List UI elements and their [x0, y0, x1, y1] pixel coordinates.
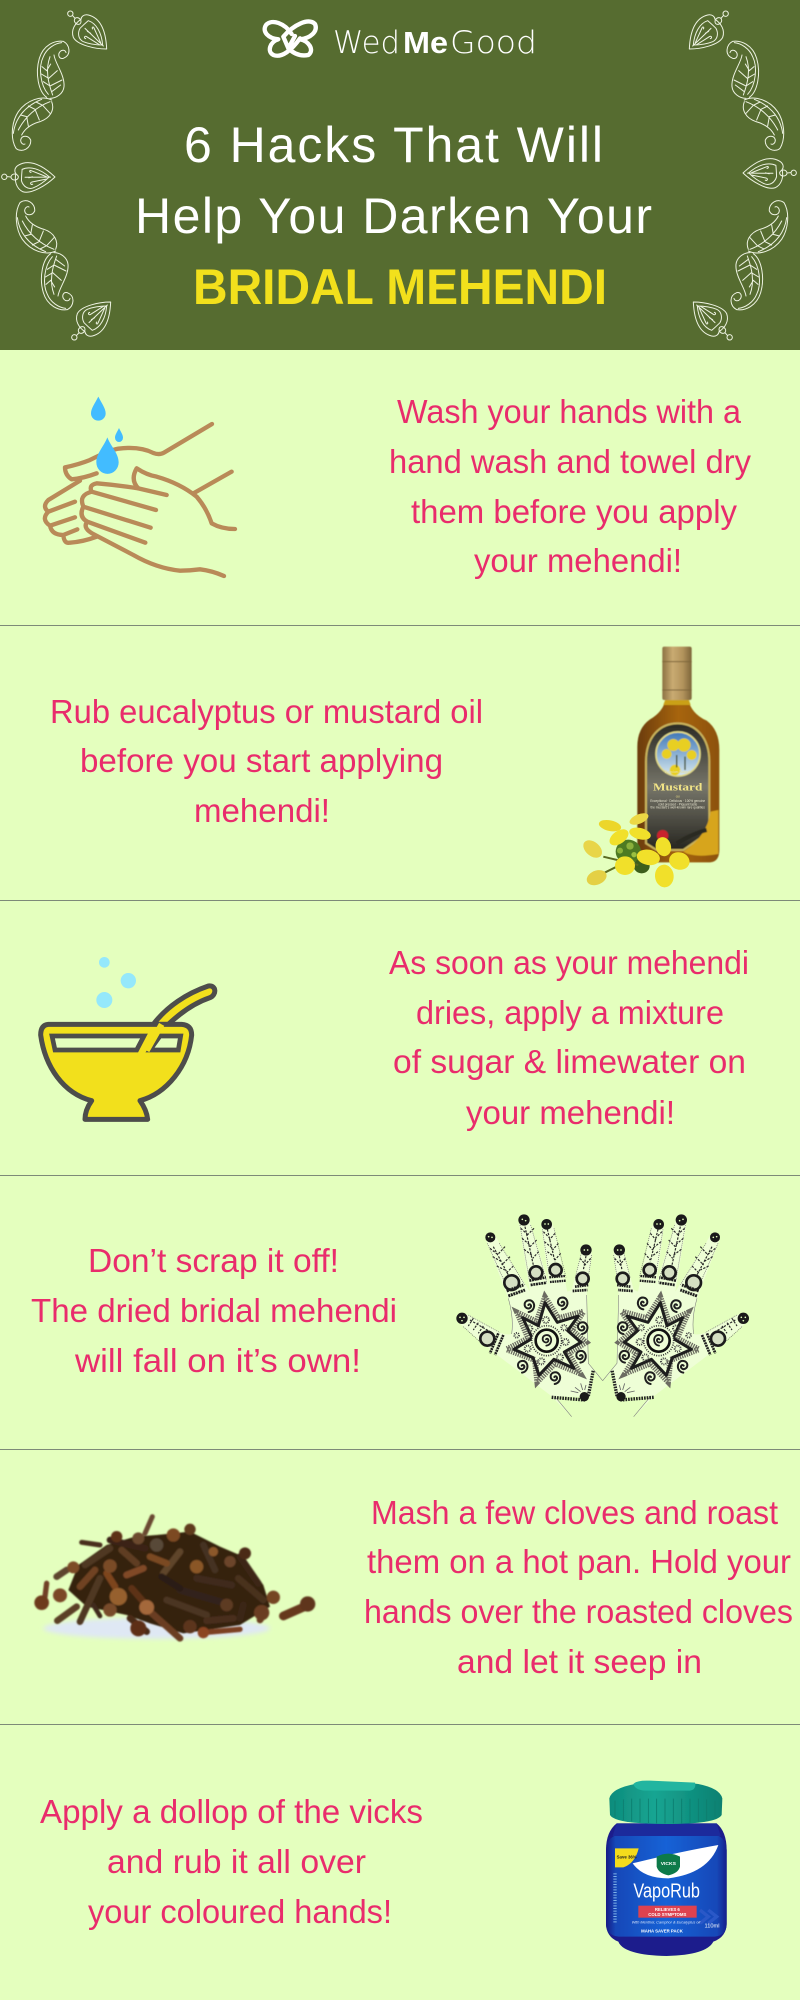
text: hack 3: dries, apply a mixture	[416, 994, 724, 1031]
icon: VapoRub jar	[606, 1781, 727, 1956]
text: hack 2: mehendi!	[194, 792, 330, 829]
panel: hack 6 vicks	[0, 1725, 800, 2000]
jar text: 110ml	[704, 1923, 719, 1929]
text: hack 6	[40, 1793, 423, 1930]
jar text: RELIEVES 6	[655, 1907, 680, 1912]
text: hack 5: and let it seep in	[457, 1643, 702, 1680]
logo: WedMeGood	[265, 22, 537, 61]
panel: hack 1 hand wash	[0, 350, 800, 625]
text: hack 1: your mehendi!	[474, 542, 682, 579]
text: hack 2: Rub eucalyptus or mustard oil	[50, 693, 483, 730]
decorative leaf: left centre	[1, 150, 55, 204]
text: hack 4: will fall on it’s own!	[74, 1342, 361, 1379]
title: 6 Hacks That Will	[184, 117, 603, 173]
text: hack 4: Don’t scrap it off!	[88, 1242, 339, 1279]
text: hack 6: and rub it all over	[107, 1843, 366, 1880]
text: hack 3: As soon as your mehendi	[389, 944, 749, 981]
title	[135, 117, 652, 315]
decorative leaf: right centre	[743, 146, 797, 200]
title: BRIDAL MEHENDI	[193, 259, 607, 315]
text: hack 1: hand wash and towel dry	[389, 443, 751, 480]
wordmark	[333, 25, 537, 61]
label text: Premium Natural	[665, 770, 690, 774]
jar text: MAHA SAVER PACK	[641, 1928, 684, 1933]
icon: washing hands with water drops	[45, 397, 235, 576]
label text: Exceptional · Delicious · 100% genuine	[650, 799, 705, 803]
jar text: VICKS	[661, 1861, 677, 1867]
text: hack 6: Apply a dollop of the vicks	[40, 1793, 423, 1830]
decorative mehendi border: bottom right	[693, 201, 788, 340]
text: hack 1: Wash your hands with a	[397, 393, 742, 430]
title: Help You Darken Your	[135, 188, 652, 244]
text: hack 3	[389, 944, 749, 1131]
text: hack 1	[389, 393, 751, 579]
panel: hack 4 do not scrape	[0, 1176, 800, 1449]
text: hack 4	[31, 1242, 397, 1379]
text: hack 4: The dried bridal mehendi	[31, 1292, 397, 1329]
wordmark: Wed	[333, 25, 400, 61]
icon: pile of cloves	[34, 1517, 315, 1639]
text: hack 2	[50, 693, 483, 829]
jar text	[617, 1854, 719, 1933]
decorative mehendi border: bottom left	[16, 201, 111, 340]
jar text: VapoRub	[633, 1879, 700, 1902]
text: hack 3: of sugar & limewater on	[393, 1043, 746, 1080]
text: hack 5	[364, 1494, 793, 1680]
label text: Mustard	[653, 782, 702, 794]
icon: mehendi patterned hands	[456, 1214, 749, 1417]
decorative mehendi border: top left	[12, 11, 107, 150]
decorative mehendi border: top right	[689, 11, 784, 150]
text: hack 5: hands over the roasted cloves	[364, 1593, 793, 1630]
wordmark: Me	[403, 25, 448, 60]
text: hack 5: them on a hot pan. Hold your	[367, 1543, 791, 1580]
jar text: COLD SYMPTOMS	[648, 1912, 687, 1917]
text: hack 5: Mash a few cloves and roast	[371, 1494, 778, 1531]
text: hack 1: them before you apply	[411, 493, 737, 530]
label text	[650, 770, 705, 810]
jar text: Save 36%	[617, 1854, 637, 1859]
text: hack 2: before you start applying	[80, 742, 443, 779]
panel: header	[0, 0, 800, 350]
panel: hack 2 mustard oil	[0, 626, 800, 900]
label text: the mustard's well-known rare qualities	[651, 806, 705, 810]
label text: cold pressed · Piquant taste	[658, 802, 697, 806]
icon: yellow bowl with spoon and bubbles	[41, 957, 215, 1119]
panel: hack 5 cloves	[0, 1450, 800, 1724]
text: hack 6: your coloured hands!	[88, 1893, 392, 1930]
wordmark: Good	[450, 25, 537, 61]
icon: mustard oil bottle with flowers	[580, 647, 719, 888]
icon: butterfly knot	[265, 22, 316, 56]
label text: Oil	[676, 794, 680, 798]
jar text: With Menthol, Camphor & Eucalyptus oil	[632, 1920, 700, 1924]
panel: hack 3 sugar and limewater	[0, 901, 800, 1175]
text: hack 3: your mehendi!	[466, 1094, 675, 1131]
